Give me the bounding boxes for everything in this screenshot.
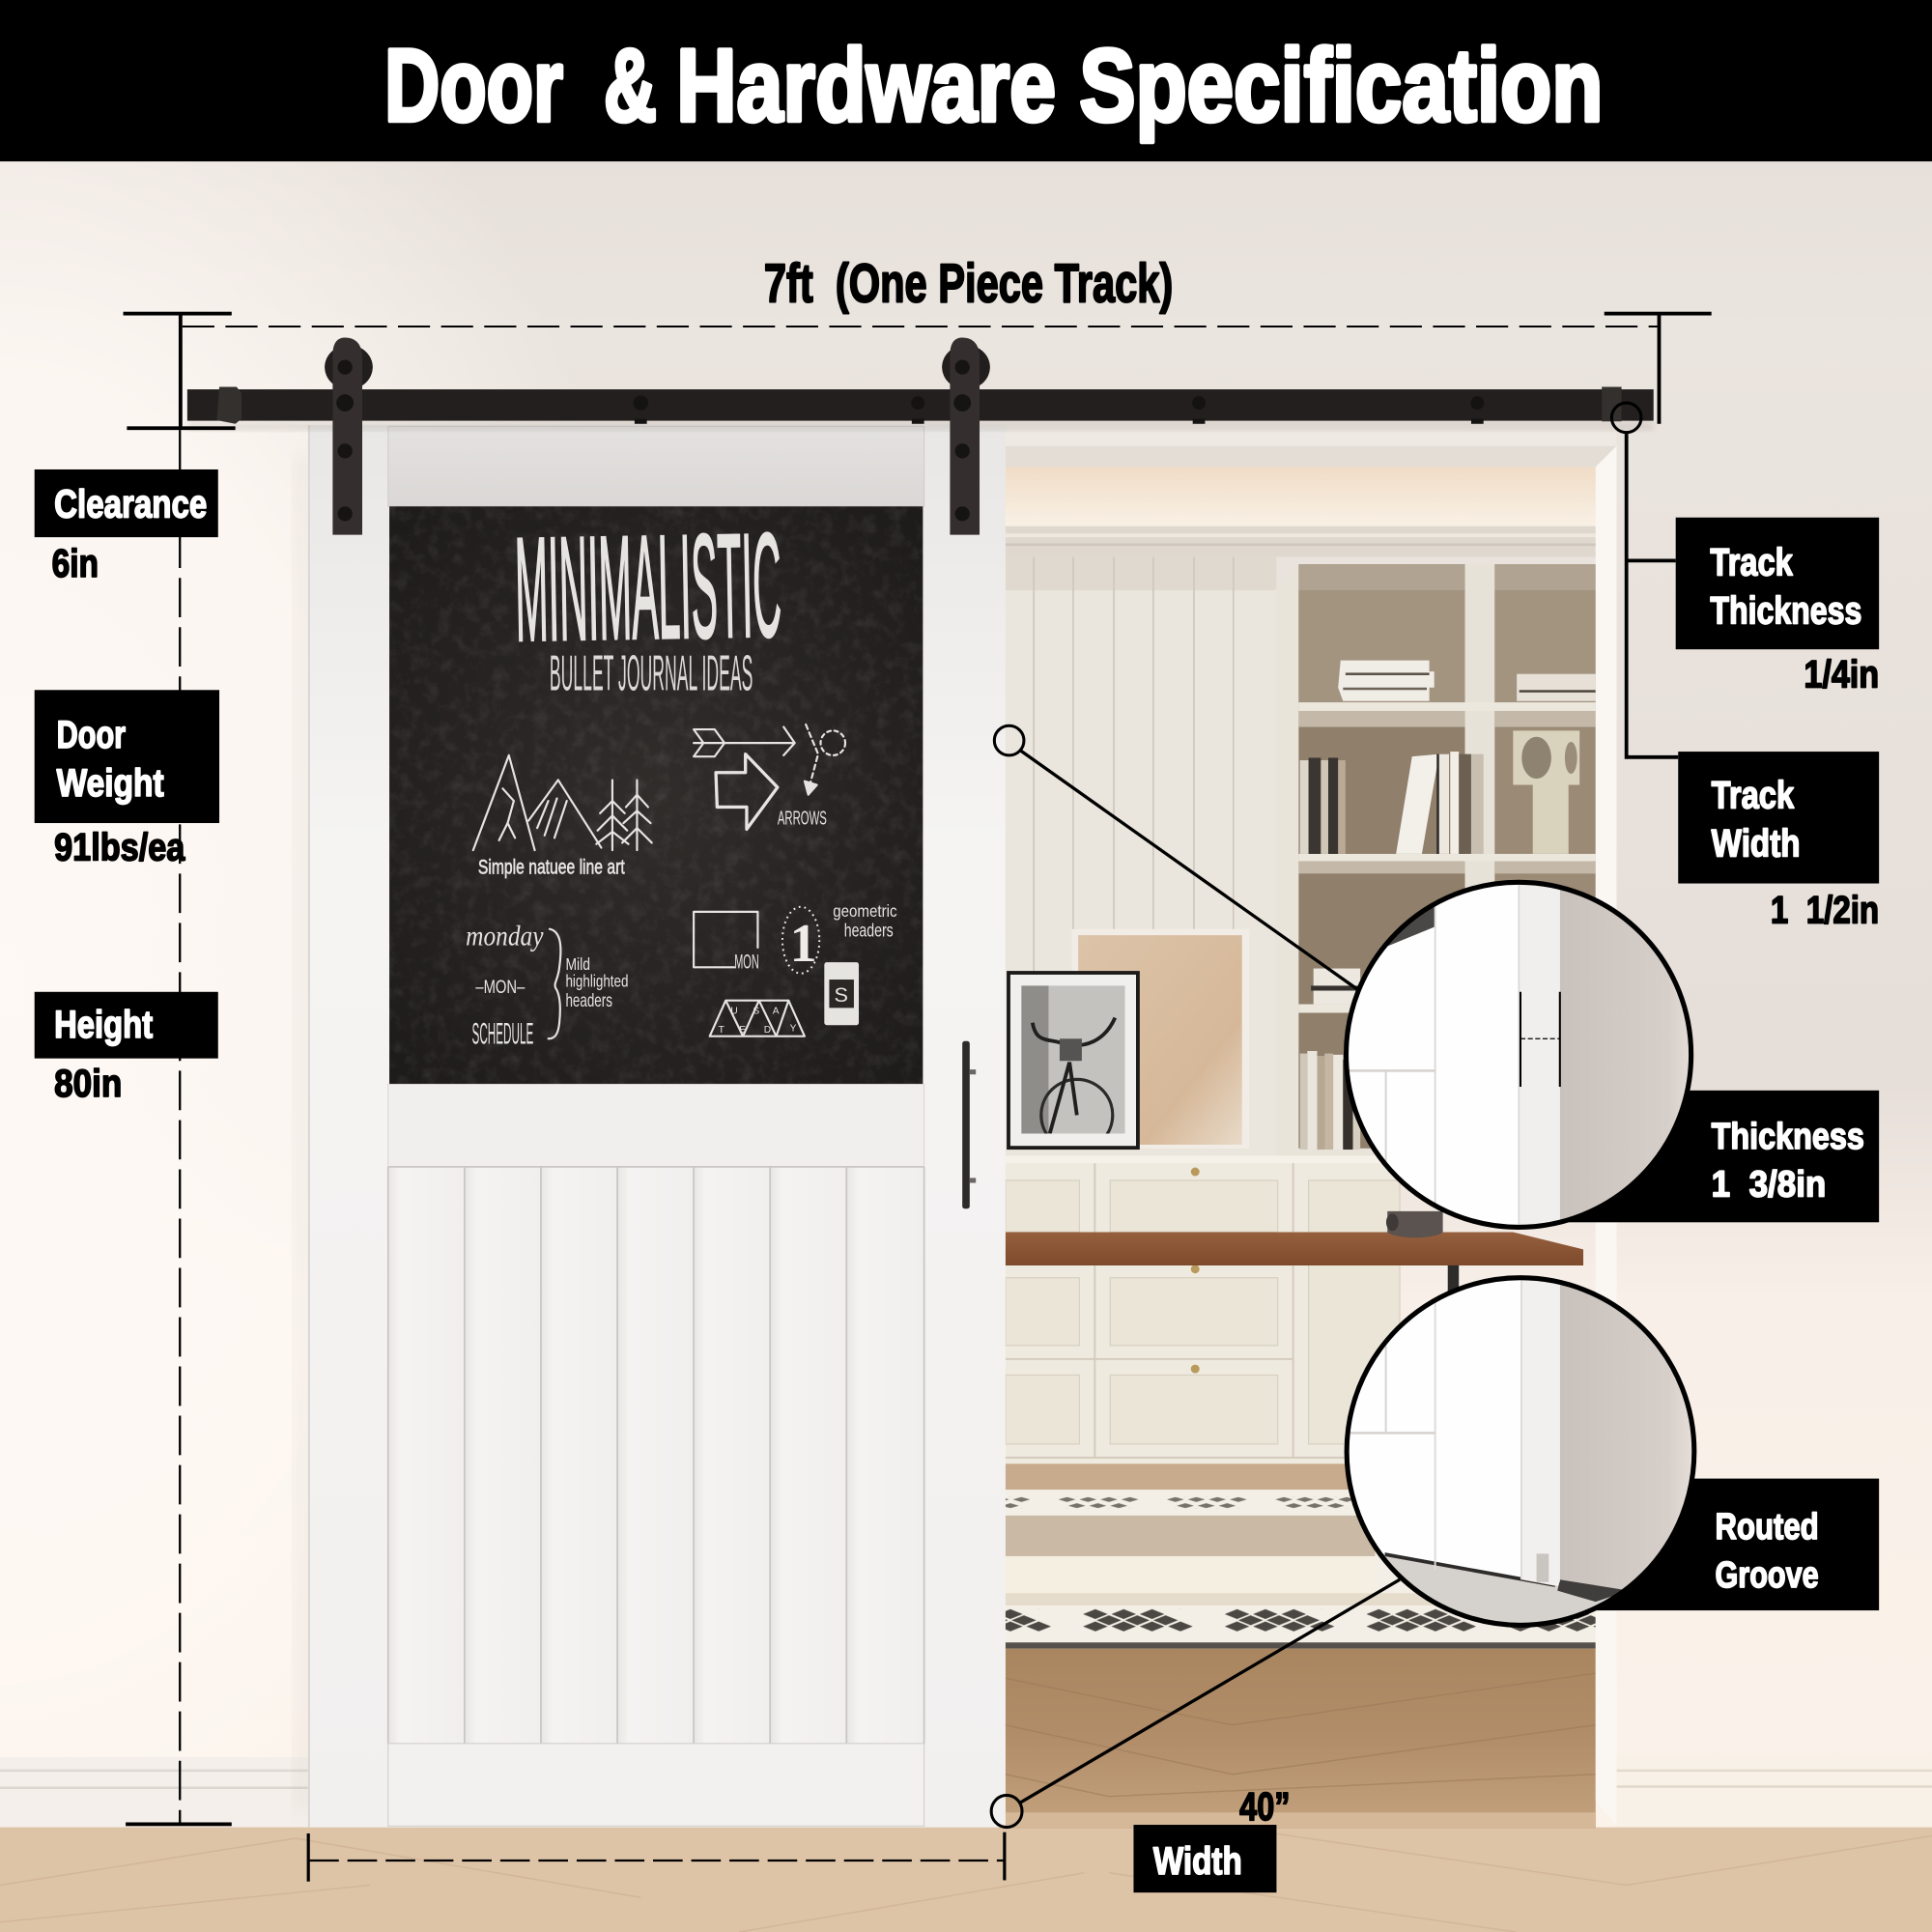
- label box: track width: [1678, 752, 1879, 884]
- crown moulding: [1006, 526, 1597, 557]
- art print leaning: [1072, 929, 1249, 1149]
- chalk geometric headers: MON: [734, 950, 759, 974]
- label box: track thickness: Track: [1710, 542, 1794, 584]
- table top: [1006, 1233, 1583, 1295]
- right track stop: [1602, 387, 1622, 421]
- shelf books and sculpture: [1300, 661, 1596, 1150]
- chalk schedule headers: –MON–: [475, 978, 526, 998]
- label box: door weight: Weight: [57, 762, 164, 805]
- ceiling cove light: [1006, 467, 1597, 526]
- track thickness value: 1/4in: [1804, 654, 1879, 696]
- door edge: [1521, 1276, 1560, 1586]
- magnifier: door thickness: [1346, 882, 1693, 1231]
- track length label: 7ft (One Piece Track): [764, 252, 1173, 313]
- chalk geometric headers: 1: [790, 914, 817, 974]
- groove notch: [1537, 1553, 1548, 1582]
- doorway view into room: [1006, 425, 1616, 1829]
- label box: track width: Width: [1712, 822, 1801, 865]
- barn door: [308, 425, 1006, 1828]
- chalk arrows caption: ARROWS: [778, 808, 827, 829]
- label box: height: Height: [54, 1004, 153, 1046]
- label box: routed groove: Groove: [1716, 1554, 1819, 1596]
- chalk schedule headers: highlighted: [565, 972, 629, 991]
- bottom rail: [388, 1744, 924, 1826]
- door stiles: [308, 425, 1006, 1828]
- title: [384, 27, 1603, 143]
- chalk geometric headers: headers: [844, 921, 894, 941]
- chalk geometric headers: E: [739, 1025, 746, 1036]
- chalk mountains: [473, 755, 652, 850]
- label box: track width: Track: [1712, 775, 1795, 817]
- chalk schedule headers: monday: [466, 921, 544, 952]
- track bolts: [634, 395, 1484, 424]
- strip of room floor: [1006, 1463, 1350, 1491]
- left hanger: [325, 337, 373, 535]
- label box: thickness: 1 3/8in: [1712, 1164, 1826, 1206]
- floor: [1382, 1553, 1609, 1623]
- left track stop: [216, 387, 242, 424]
- chalk geometric headers: A: [773, 1007, 780, 1017]
- text: MINIMALISTIC: [514, 502, 782, 672]
- track width value: 1 1/2in: [1771, 889, 1879, 931]
- chalk geometric headers: [694, 901, 897, 1037]
- title: &: [604, 27, 657, 143]
- chalk geometric headers: S: [753, 1007, 759, 1017]
- magnifier: routed groove: [1346, 1276, 1695, 1627]
- title: Specification: [1079, 27, 1603, 143]
- label box: track thickness: [1676, 518, 1879, 649]
- track rail: [187, 387, 1654, 430]
- chalk schedule headers: [466, 921, 629, 1050]
- label box: door weight: [35, 690, 219, 823]
- title: Door: [384, 27, 563, 143]
- label box: clearance: [35, 469, 218, 537]
- thickness marker: [1520, 992, 1560, 1087]
- dimension: track length: [124, 312, 1712, 424]
- chalk geometric headers: S: [835, 982, 848, 1007]
- label box: clearance: Clearance: [54, 482, 207, 526]
- door shadow on wall: [296, 456, 310, 1811]
- door edge: [1520, 882, 1560, 1230]
- lock rail: [388, 1084, 924, 1167]
- chalk arrows: [694, 724, 845, 829]
- chalk geometric headers: T: [719, 1025, 724, 1036]
- chalk geometric headers: D: [764, 1025, 771, 1036]
- parquet floor: [1006, 1649, 1596, 1829]
- top rail: [388, 426, 924, 506]
- chalk geometric headers: U: [730, 1007, 738, 1017]
- door handle: [962, 1041, 976, 1208]
- label box: routed groove: Routed: [1716, 1506, 1819, 1548]
- floor: [0, 1828, 1932, 1932]
- framed bicycle photo: [1007, 971, 1140, 1151]
- panelled back wall: [1006, 557, 1276, 1161]
- width value: 40”: [1239, 1784, 1290, 1829]
- title bar: [0, 0, 1932, 161]
- bookcase: [1275, 564, 1596, 1161]
- cabinets: [1006, 1155, 1400, 1466]
- dimension: door width: [307, 1833, 1006, 1882]
- callout lines for track: [1611, 403, 1678, 757]
- cup on table: [1386, 1211, 1443, 1237]
- chalkboard panel: BULLET JOURNAL IDEAS: [550, 645, 753, 701]
- chalk schedule headers: Mild: [565, 954, 590, 974]
- chalk schedule headers: headers: [565, 991, 612, 1011]
- height value: 80in: [54, 1063, 122, 1105]
- label box: height: [35, 992, 218, 1059]
- right hanger: [942, 337, 990, 535]
- label box: track thickness: Thickness: [1710, 589, 1861, 632]
- label box: thickness: [1555, 1091, 1879, 1222]
- vertical planks: [388, 1167, 924, 1744]
- rail and chalkboard corner: [1387, 906, 1435, 947]
- label box: routed groove: [1555, 1479, 1879, 1610]
- door weight value: 91lbs/ea: [54, 826, 185, 868]
- label box: thickness: Thickness: [1712, 1116, 1864, 1157]
- label box: width: [1133, 1825, 1276, 1892]
- dimension: clearance and height: [126, 313, 236, 1826]
- chalk schedule headers: SCHEDULE: [472, 1015, 533, 1050]
- chalkboard panel: [389, 502, 923, 1084]
- door casing right: [1596, 446, 1616, 1826]
- title: Hardware: [676, 27, 1056, 143]
- right baseboard: [1616, 1753, 1932, 1828]
- chalk geometric headers: geometric: [833, 901, 897, 921]
- doorway frame top: [1006, 425, 1616, 466]
- chalk geometric headers: Y: [790, 1024, 797, 1035]
- left baseboard: [0, 1757, 308, 1829]
- rug: [1006, 1490, 1596, 1649]
- label box: width: Width: [1153, 1840, 1242, 1883]
- callout line to thickness magnifier: [994, 725, 1363, 993]
- clearance value: 6in: [52, 541, 99, 585]
- callout line to groove magnifier: [991, 1579, 1400, 1828]
- chalk nature caption: Simple natuee line art: [478, 854, 625, 878]
- label box: door weight: Door: [57, 714, 126, 756]
